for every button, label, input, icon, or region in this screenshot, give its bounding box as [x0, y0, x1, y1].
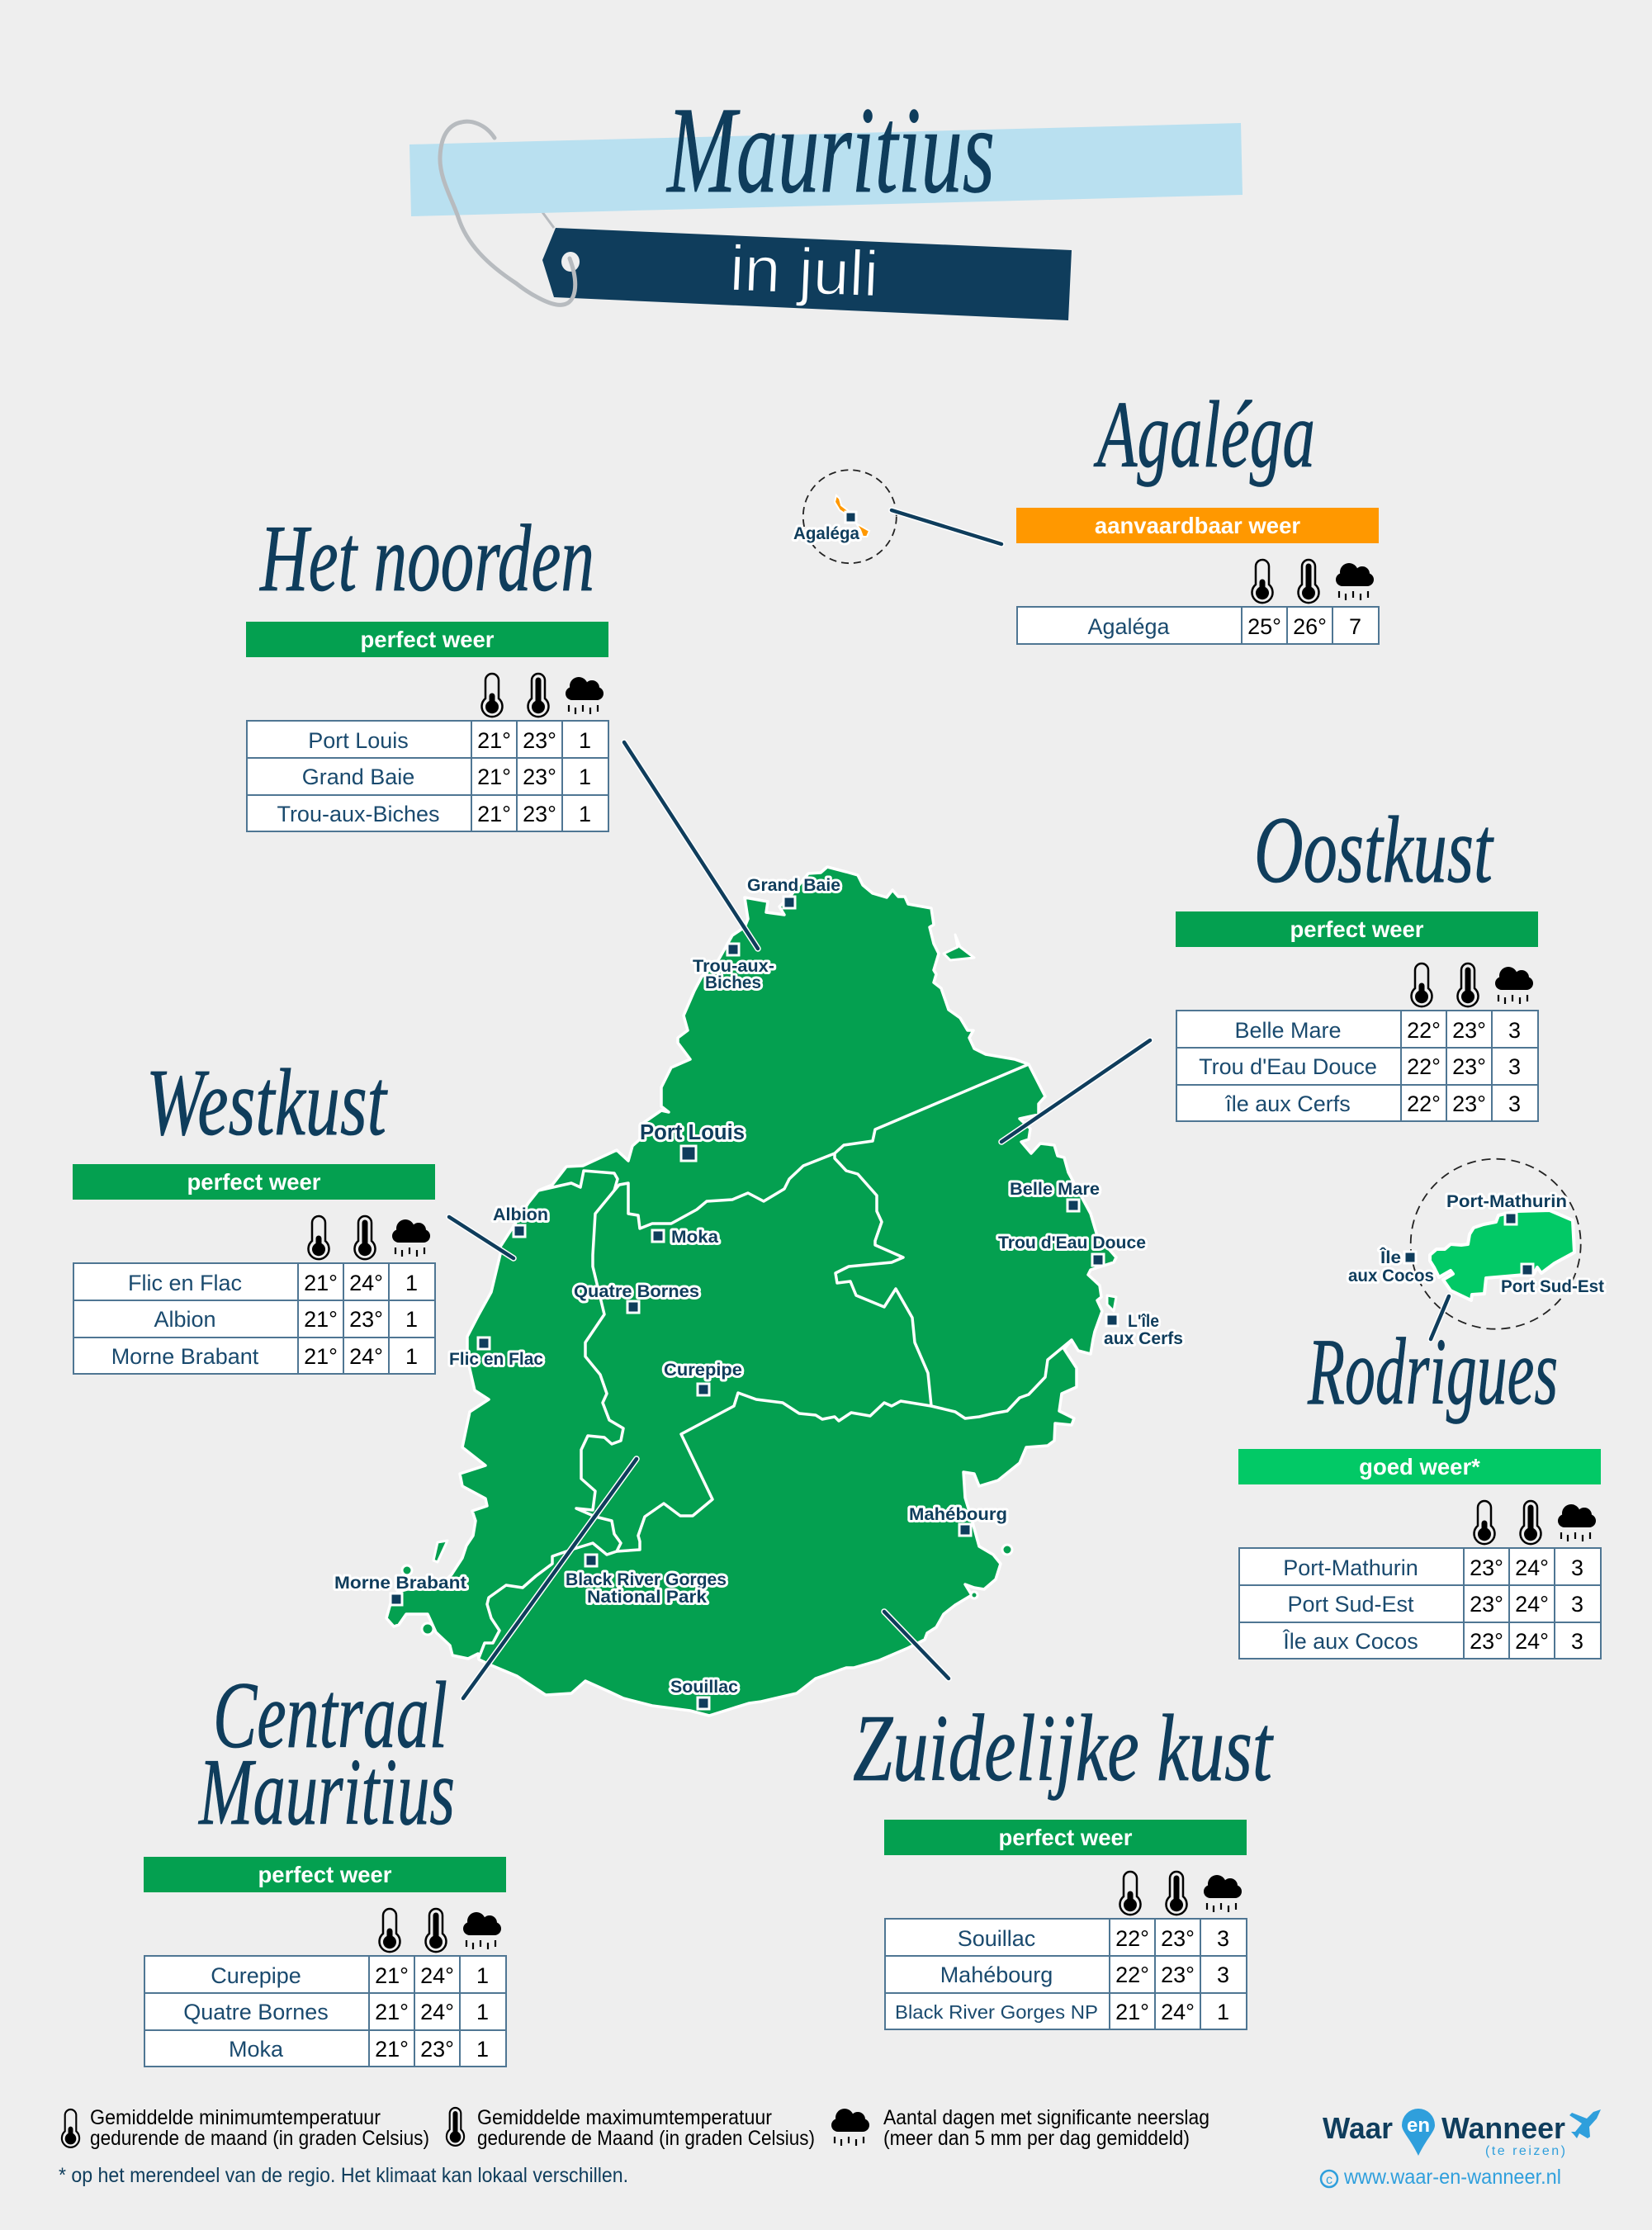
legend: minimum temperature — [62, 2106, 429, 2150]
city labels: Albion — [493, 1205, 548, 1224]
inset map: Rodrigues — [1348, 1159, 1604, 1329]
panel: Centraal Mauritius: perfect weer — [258, 1862, 392, 1887]
panel: Westkust: 21° — [304, 1307, 338, 1332]
city labels: Trou d'Eau Douce — [998, 1233, 1146, 1252]
panel: Westkust: Flic en Flac — [128, 1271, 242, 1295]
island outline — [386, 867, 1116, 1716]
tag: in juli — [542, 228, 1072, 320]
panel: Centraal Mauritius: 24° — [420, 2000, 454, 2024]
panel: Zuidelijke kust: Black River Gorges NP — [895, 2001, 1098, 2023]
panel: Zuidelijke kust — [884, 1820, 1247, 2029]
panel: Het noorden: 21° — [477, 802, 511, 826]
city labels: Biches — [705, 973, 761, 992]
icon: airplane — [1569, 2109, 1601, 2138]
panel: Oostkust: 3 — [1508, 1054, 1521, 1079]
panel: Rodrigues: 23° — [1470, 1629, 1503, 1654]
panel: Agaléga: 7 — [1349, 614, 1361, 639]
panel: Westkust: 21° — [304, 1271, 338, 1295]
luggage ring — [440, 121, 575, 305]
inset map: Rodrigues: Île — [1380, 1248, 1401, 1267]
panel: Het noorden: Port Louis — [308, 728, 409, 753]
panel: Centraal Mauritius: 24° — [420, 1963, 454, 1988]
panel: Oostkust: 22° — [1407, 1018, 1441, 1043]
panel: Zuidelijke kust: 23° — [1161, 1962, 1195, 1987]
panel: Centraal Mauritius: 1 — [476, 2000, 489, 2024]
heading: Centraal Mauritius: Centraal — [213, 1663, 447, 1768]
panel: Zuidelijke kust: 21° — [1115, 2000, 1149, 2024]
legend: minimum temperature: gedurende de maand (in graden Celsius) — [90, 2127, 429, 2150]
panel: Centraal Mauritius — [144, 1857, 506, 2067]
panel: Oostkust: 3 — [1508, 1018, 1521, 1043]
panel: Centraal Mauritius: 21° — [375, 2037, 409, 2062]
panel: Rodrigues — [1238, 1449, 1601, 1659]
city labels: Port Louis — [640, 1121, 745, 1144]
legend: maximum temperature: Gemiddelde maximumtemperatuur — [477, 2106, 772, 2129]
city labels: L'île — [1128, 1312, 1159, 1331]
panel: Het noorden — [246, 622, 608, 831]
legend: minimum temperature: Gemiddelde minimumtemperatuur — [90, 2106, 381, 2129]
inset map: Agaléga — [793, 470, 897, 563]
legend: precipitation: (meer dan 5 mm per dag gemiddeld) — [883, 2127, 1190, 2150]
panel: Oostkust: 23° — [1452, 1054, 1486, 1079]
panel: Westkust — [73, 1164, 435, 1374]
heading: Oostkust: Oostkust — [1254, 798, 1494, 902]
copyright and url: c — [1326, 2173, 1332, 2187]
panel: Zuidelijke kust: Mahébourg — [940, 1962, 1053, 1987]
panel: Rodrigues: 24° — [1515, 1555, 1549, 1580]
panel: Agaléga — [1016, 508, 1379, 644]
panel: Zuidelijke kust: 1 — [1217, 2000, 1229, 2024]
panel: Agaléga: Agaléga — [1087, 614, 1171, 639]
panel: Oostkust: Belle Mare — [1234, 1018, 1342, 1043]
panel: Rodrigues: 24° — [1515, 1629, 1549, 1654]
inset map: Rodrigues: aux Cocos — [1348, 1267, 1434, 1285]
panel: Rodrigues: Port Sud-Est — [1287, 1592, 1414, 1617]
panel: Westkust: perfect weer — [187, 1169, 321, 1195]
city labels: Flic en Flac — [449, 1350, 543, 1369]
panel: Zuidelijke kust: 3 — [1217, 1962, 1229, 1987]
panel: Oostkust: 23° — [1452, 1018, 1486, 1043]
islets — [402, 935, 1116, 1635]
logo: Waar en Wanneer: (te reizen) — [1485, 2144, 1565, 2158]
panel: Centraal Mauritius: Curepipe — [211, 1963, 301, 1988]
heading: Het noorden: Het noorden — [259, 506, 594, 611]
panel: Zuidelijke kust: perfect weer — [998, 1825, 1133, 1850]
panel: Het noorden: 1 — [579, 765, 591, 789]
panel: Rodrigues: 23° — [1470, 1592, 1503, 1617]
panel: Het noorden: Grand Baie — [302, 765, 414, 789]
panel: Het noorden: perfect weer — [360, 627, 495, 652]
city labels: National Park — [587, 1588, 707, 1607]
panel: Centraal Mauritius: 21° — [375, 1963, 409, 1988]
panel: Rodrigues: 3 — [1571, 1592, 1583, 1617]
heading: Centraal Mauritius — [198, 1663, 455, 1844]
panel: Oostkust: perfect weer — [1290, 916, 1424, 942]
panel: Westkust: Morne Brabant — [111, 1344, 259, 1369]
panel: Het noorden: 1 — [579, 728, 591, 753]
region borders — [479, 1064, 1072, 1658]
panel: Westkust: 21° — [304, 1344, 338, 1369]
panel: Westkust: 24° — [349, 1271, 383, 1295]
panel: Rodrigues: Port-Mathurin — [1283, 1555, 1418, 1580]
city labels: Morne Brabant — [334, 1574, 466, 1593]
panel: Zuidelijke kust: 23° — [1161, 1926, 1195, 1951]
city labels: Trou-aux- — [693, 957, 774, 976]
legend: maximum temperature — [447, 2106, 815, 2150]
copyright and url: www.waar-en-wanneer.nl — [1343, 2166, 1561, 2189]
panel: Het noorden: Trou-aux-Biches — [277, 802, 440, 826]
panel: Zuidelijke kust: Souillac — [958, 1926, 1035, 1951]
panel: Centraal Mauritius: Quatre Bornes — [183, 2000, 329, 2024]
panel: Oostkust: 22° — [1407, 1054, 1441, 1079]
panel: Westkust: 24° — [349, 1344, 383, 1369]
panel: Oostkust: Trou d'Eau Douce — [1199, 1054, 1377, 1079]
logo: Waar en Wanneer — [1321, 2109, 1601, 2189]
panel: Rodrigues: Île aux Cocos — [1282, 1628, 1418, 1654]
logo: Waar en Wanneer: Waar — [1323, 2111, 1393, 2145]
city labels: aux Cerfs — [1104, 1329, 1183, 1348]
panel: Centraal Mauritius: 1 — [476, 2037, 489, 2062]
tag: in juli: in juli — [728, 231, 880, 310]
panel: Agaléga: 26° — [1293, 614, 1327, 639]
panel: Centraal Mauritius: 1 — [476, 1963, 489, 1988]
panel: Het noorden: 21° — [477, 765, 511, 789]
city labels: Grand Baie — [747, 876, 840, 895]
panel: Zuidelijke kust: 3 — [1217, 1926, 1229, 1951]
panel: Zuidelijke kust: 22° — [1115, 1962, 1149, 1987]
inset map: Rodrigues: Port Sud-Est — [1501, 1277, 1604, 1296]
panel: Oostkust: île aux Cerfs — [1224, 1091, 1351, 1116]
panel: Zuidelijke kust: 24° — [1161, 2000, 1195, 2024]
panel: Zuidelijke kust: 22° — [1115, 1926, 1149, 1951]
panel: Westkust: 23° — [349, 1307, 383, 1332]
legend — [62, 2106, 1209, 2150]
heading: Westkust: Westkust — [146, 1050, 388, 1155]
panel: Oostkust: 3 — [1508, 1091, 1521, 1116]
panel: Centraal Mauritius: 21° — [375, 2000, 409, 2024]
city labels: Belle Mare — [1010, 1180, 1100, 1199]
panel: Westkust: 1 — [405, 1307, 418, 1332]
logo: Waar en Wanneer: Wanneer — [1441, 2111, 1565, 2145]
city labels: Moka — [671, 1228, 718, 1247]
panel: Rodrigues: 3 — [1571, 1555, 1583, 1580]
panel: Centraal Mauritius: 23° — [420, 2037, 454, 2062]
panel: Westkust: Albion — [154, 1307, 216, 1332]
city labels: Black River Gorges — [566, 1570, 727, 1589]
panel: Westkust: 1 — [405, 1271, 418, 1295]
panel: Oostkust: 23° — [1452, 1091, 1486, 1116]
panel: Westkust: 1 — [405, 1344, 418, 1369]
panel: Oostkust — [1176, 911, 1538, 1121]
inset map: Rodrigues: Port-Mathurin — [1446, 1192, 1567, 1211]
panel: Rodrigues: 24° — [1515, 1592, 1549, 1617]
city labels — [334, 876, 1183, 1697]
city markers — [391, 897, 1118, 1709]
panel: Rodrigues: goed weer* — [1359, 1454, 1480, 1480]
city labels: Curepipe — [664, 1361, 742, 1380]
panel: Oostkust: 22° — [1407, 1091, 1441, 1116]
heading: Agaléga: Agaléga — [1093, 382, 1315, 487]
legend: maximum temperature: gedurende de Maand (in graden Celsius) — [477, 2127, 815, 2150]
panel: Het noorden: 1 — [579, 802, 591, 826]
panel: Agaléga: aanvaardbaar weer — [1095, 513, 1300, 538]
panel: Het noorden: 21° — [477, 728, 511, 753]
city labels: Souillac — [670, 1678, 738, 1697]
heading: Zuidelijke kust: Zuidelijke kust — [853, 1696, 1274, 1801]
footnote: * op het merendeel van de regio. Het klimaat kan lokaal verschillen. — [59, 2164, 628, 2187]
legend: precipitation — [831, 2106, 1209, 2150]
panel: Het noorden: 23° — [523, 765, 556, 789]
title block — [409, 82, 1243, 320]
city labels: Quatre Bornes — [574, 1282, 699, 1301]
panel: Het noorden: 23° — [523, 802, 556, 826]
city labels: Mahébourg — [909, 1505, 1007, 1524]
title band — [409, 123, 1243, 216]
map: Mauritius — [334, 867, 1183, 1716]
panel: Rodrigues: 3 — [1571, 1629, 1583, 1654]
logo: Waar en Wanneer: en — [1407, 2114, 1430, 2137]
inset map: Agaléga: Agaléga — [793, 524, 859, 543]
main title: Mauritius — [666, 82, 995, 219]
heading: Centraal Mauritius: Mauritius — [198, 1740, 455, 1844]
panel: Het noorden: 23° — [523, 728, 556, 753]
icon: map pin — [1402, 2109, 1435, 2156]
panel: Centraal Mauritius: Moka — [229, 2037, 284, 2062]
leader lines — [449, 510, 1449, 1698]
panel: Agaléga: 25° — [1247, 614, 1281, 639]
panel: Rodrigues: 23° — [1470, 1555, 1503, 1580]
legend: precipitation: Aantal dagen met significante neerslag — [883, 2106, 1209, 2129]
